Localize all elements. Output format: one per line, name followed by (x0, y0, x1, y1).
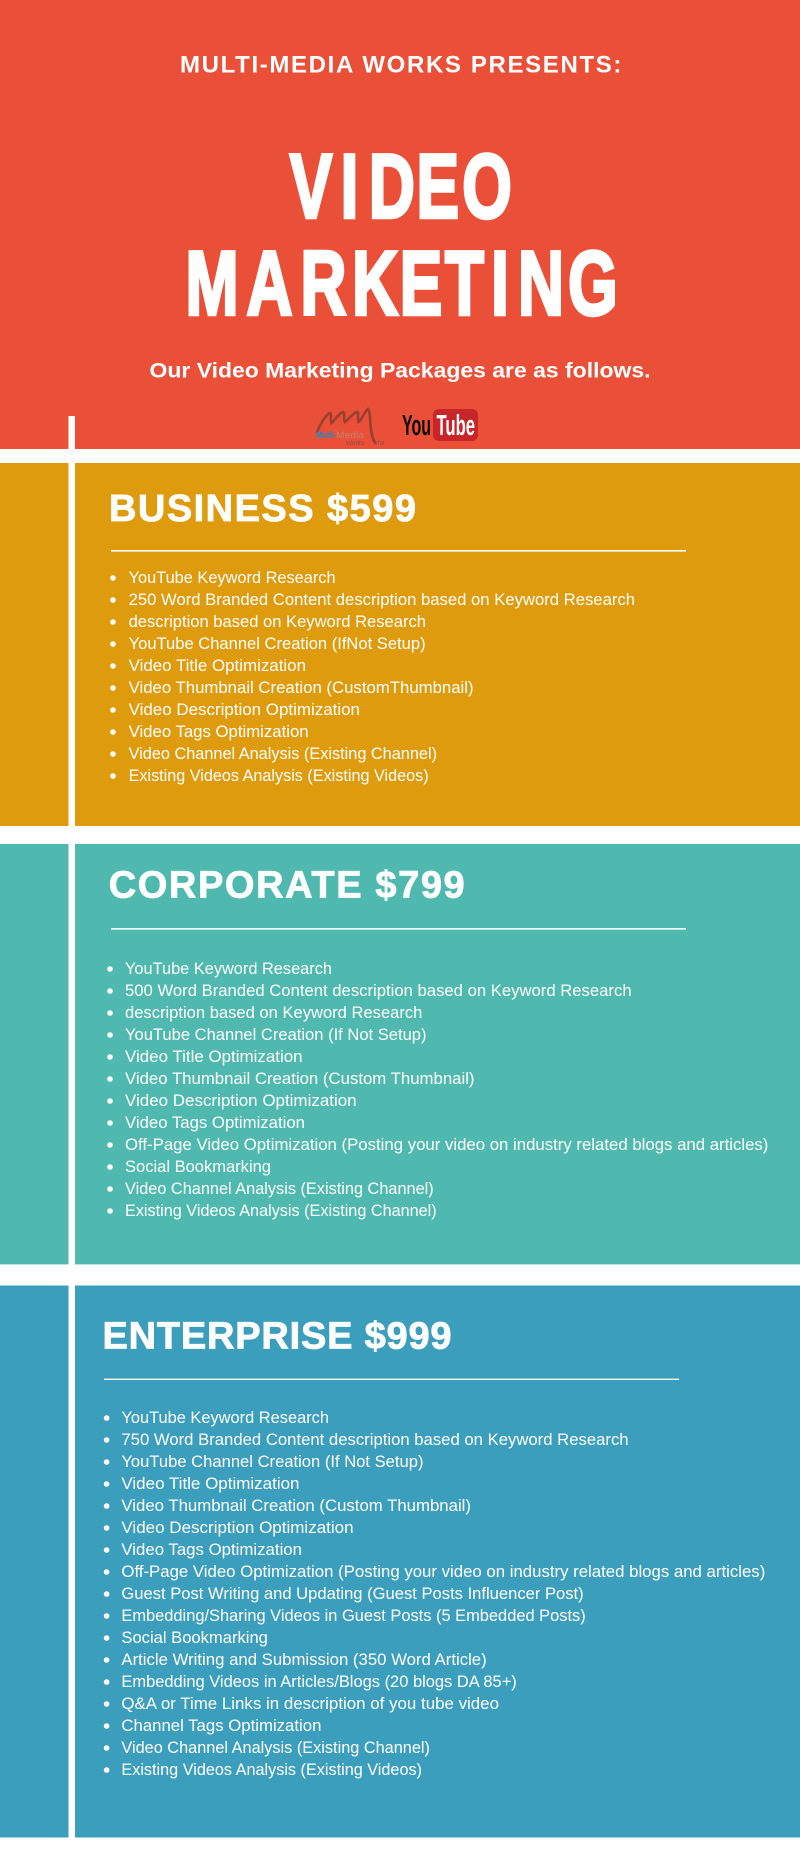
divider rule (111, 550, 686, 552)
feature list: Business: YouTube Keyword Research (129, 569, 336, 587)
feature list: Corporate: 500 Word Branded Content description based on Keyword Research (125, 982, 632, 1000)
heading: Business price: BUSINESS $599 (109, 488, 416, 530)
feature list: Corporate: description based on Keyword Research (125, 1004, 422, 1022)
icon: YouTube logo: You (402, 410, 431, 442)
title: MARKETING (185, 232, 618, 334)
title: VIDEO (290, 135, 512, 237)
feature list: Corporate: Video Tags Optimization (125, 1114, 305, 1132)
divider rule (111, 928, 686, 930)
feature list: Business: Video Tags Optimization (129, 723, 309, 741)
feature list: Corporate: Video Title Optimization (125, 1048, 303, 1066)
feature list: Business: YouTube Channel Creation (IfNot Setup) (129, 635, 426, 653)
feature list: Enterprise: Guest Post Writing and Updating (Guest Posts Influencer Post) (121, 1585, 584, 1603)
icon: Multi-Media Works logo: Media (336, 430, 364, 440)
feature list: Enterprise: Video Title Optimization (121, 1475, 300, 1493)
feature list: Enterprise: Embedding/Sharing Videos in Guest Posts (5 Embedded Posts) (121, 1607, 586, 1625)
feature list: Enterprise: YouTube Keyword Research (121, 1409, 329, 1427)
vertical accent line (68, 416, 75, 1838)
feature list: Corporate: YouTube Channel Creation (If Not Setup) (125, 1026, 426, 1044)
feature list: Enterprise: 750 Word Branded Content description based on Keyword Research (121, 1431, 629, 1449)
feature list: Enterprise (104, 1409, 765, 1779)
icon: Multi-Media Works logo: TM (377, 441, 384, 447)
feature list: Corporate: Video Thumbnail Creation (Custom Thumbnail) (125, 1070, 474, 1088)
feature list: Enterprise: Video Tags Optimization (121, 1541, 302, 1559)
feature list: Corporate: Video Description Optimization (125, 1092, 357, 1110)
feature list: Enterprise: YouTube Channel Creation (If Not Setup) (121, 1453, 424, 1471)
divider rule (104, 1379, 679, 1380)
feature list: Corporate: Video Channel Analysis (Existing Channel) (125, 1180, 434, 1198)
icon: Multi-Media Works logo: Multi- (316, 430, 336, 440)
feature list: Enterprise: Video Channel Analysis (Existing Channel) (121, 1739, 430, 1757)
icon: Multi-Media Works logo: Works (346, 441, 364, 447)
feature list: Business: Video Channel Analysis (Existing Channel) (129, 745, 437, 763)
feature list: Enterprise: Video Description Optimization (121, 1519, 354, 1537)
feature list: Business: Existing Videos Analysis (Existing Videos) (129, 767, 429, 785)
feature list: Enterprise: Embedding Videos in Articles/Blogs (20 blogs DA 85+) (121, 1673, 517, 1691)
feature list: Enterprise: Channel Tags Optimization (121, 1717, 321, 1735)
feature list: Corporate (107, 960, 768, 1220)
feature list: Enterprise: Existing Videos Analysis (Existing Videos) (121, 1761, 422, 1779)
feature list: Business: Video Title Optimization (129, 657, 306, 675)
feature list: Corporate: YouTube Keyword Research (125, 960, 332, 978)
icon: YouTube logo (402, 409, 478, 442)
feature list: Enterprise: Video Thumbnail Creation (Custom Thumbnail) (121, 1497, 471, 1515)
feature list: Corporate: Existing Videos Analysis (Existing Channel) (125, 1202, 437, 1220)
feature list: Business (110, 569, 635, 785)
presenter line: MULTI-MEDIA WORKS PRESENTS: (180, 52, 621, 79)
icon: YouTube logo: Tube (436, 410, 475, 442)
subtitle: Our Video Marketing Packages are as follows. (150, 360, 650, 383)
panel: Business package (0, 463, 800, 826)
feature list: Enterprise: Off-Page Video Optimization (Posting your video on industry related blogs and articles) (121, 1563, 765, 1581)
panel: header (0, 0, 800, 449)
panel: Corporate package (0, 844, 800, 1264)
title (186, 135, 618, 334)
feature list: Enterprise: Article Writing and Submission (350 Word Article) (121, 1651, 487, 1669)
feature list: Business: 250 Word Branded Content description based on Keyword Research (129, 591, 635, 609)
feature list: Enterprise: Social Bookmarking (121, 1629, 268, 1647)
panel: Enterprise package (0, 1286, 800, 1838)
heading: Enterprise price: ENTERPRISE $999 (102, 1316, 452, 1358)
feature list: Business: Video Thumbnail Creation (CustomThumbnail) (129, 679, 474, 697)
feature list: Enterprise: Q&A or Time Links in description of you tube video (121, 1695, 499, 1713)
feature list: Business: Video Description Optimization (129, 701, 360, 719)
feature list: Business: description based on Keyword Research (129, 613, 426, 631)
feature list: Corporate: Social Bookmarking (125, 1158, 271, 1176)
heading: Corporate price: CORPORATE $799 (109, 864, 465, 906)
icon: Multi-Media Works logo (316, 409, 384, 447)
feature list: Corporate: Off-Page Video Optimization (Posting your video on industry related blogs and articles) (125, 1136, 768, 1154)
